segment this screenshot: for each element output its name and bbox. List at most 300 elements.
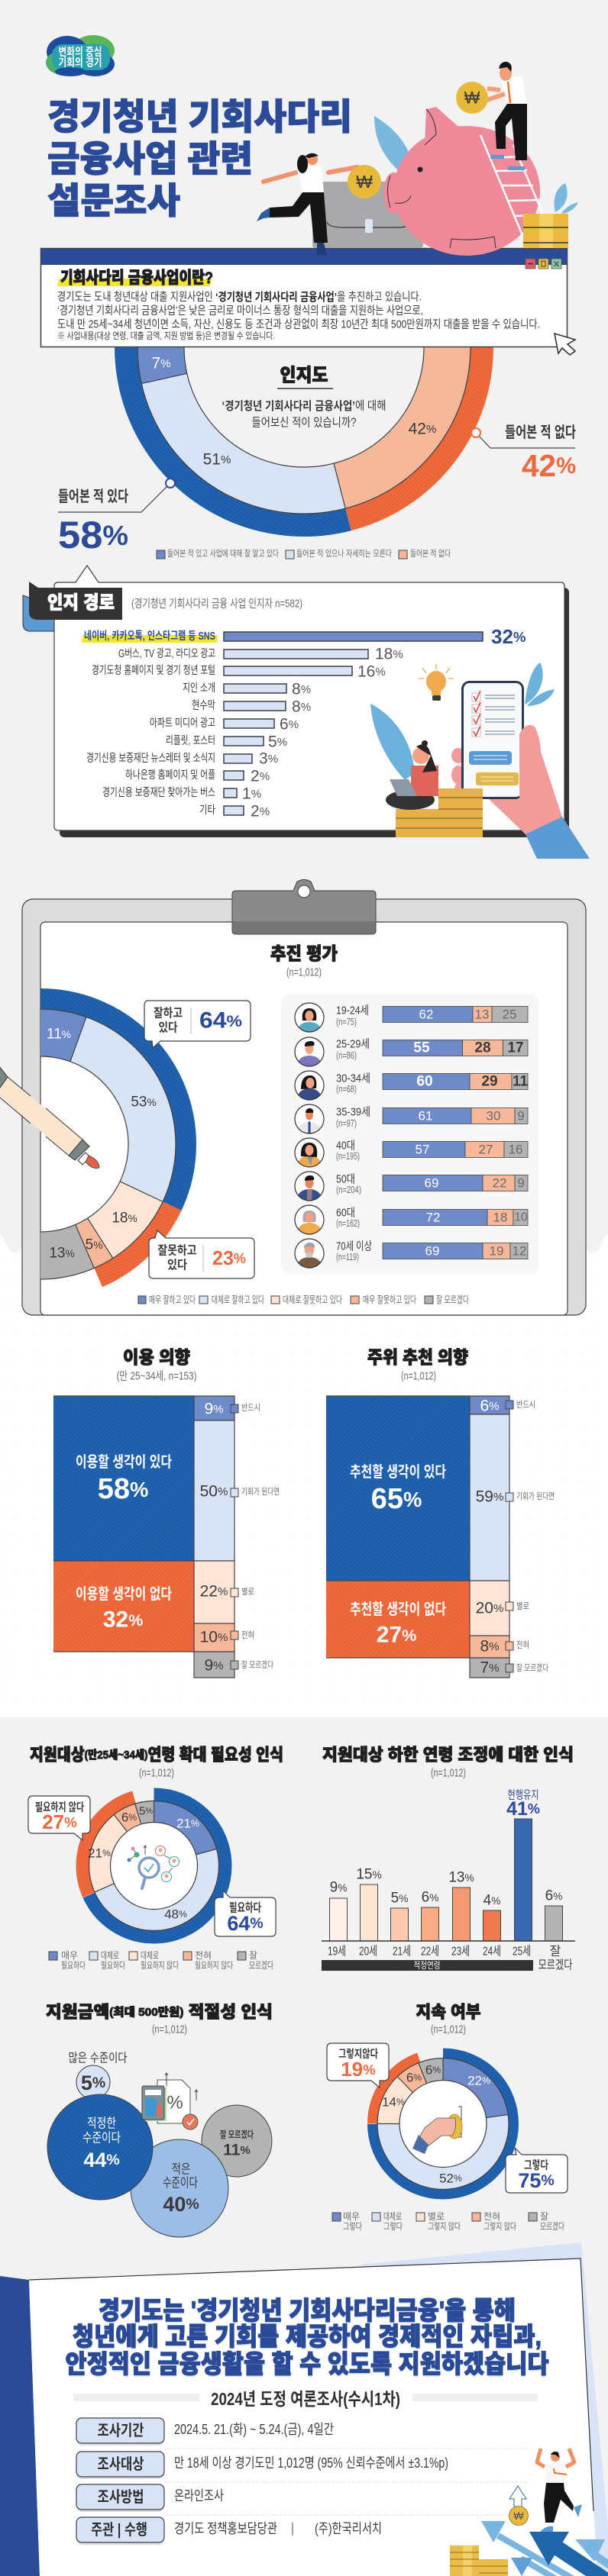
illustration: phone and hand	[370, 663, 590, 859]
paper back	[361, 2242, 608, 2576]
coin upper	[456, 82, 488, 114]
bar chart: channels: 18%	[375, 646, 403, 663]
closing headline: 청년에게 고른 기회를 제공하여 경제적인 자립과,	[73, 2322, 542, 2351]
x axis labels: 24세	[483, 1945, 501, 1959]
heading: (n=1,012)	[431, 1766, 466, 1780]
bubble: 40%	[131, 2139, 228, 2237]
row: 40s: (n=195)	[336, 1151, 360, 1162]
bubble: 5%: 5%	[81, 2071, 105, 2094]
ladder	[480, 135, 558, 248]
x axis labels: 25세	[513, 1945, 531, 1959]
row: 35-39: 35-39세	[336, 1105, 370, 1119]
donut percent labels: 42%	[409, 420, 436, 438]
window body text	[57, 290, 540, 341]
segment keys: 전혀	[241, 1630, 254, 1640]
row: 50s: 9	[517, 1175, 525, 1191]
callout: not heard 42%: 42%	[522, 448, 576, 483]
donut labels: 53%	[131, 1095, 157, 1110]
window body text: ‘경기청년 기회사다리 금융사업’은 낮은 금리로 마이너스 통장 형식의 대출을 지원하는 사업으로,	[57, 304, 423, 318]
title: 경기청년 기회사다리	[47, 96, 352, 137]
donut labels: 6%	[406, 2070, 422, 2085]
window body text: ※ 사업내용(대상 연령, 대출 금액, 지원 방법 등)은 변경될 수 있습니다.	[57, 330, 275, 341]
legend	[49, 1950, 273, 1971]
x axis labels: 23세	[451, 1945, 470, 1959]
bubble: 44%	[47, 2094, 153, 2200]
row: method: 조사방법	[98, 2488, 144, 2506]
bar chart: channels: G버스, TV 광고, 라디오 광고	[118, 647, 215, 660]
x axis labels: 모르겠다	[538, 1959, 573, 1972]
legend: awareness: 들어본 적 있고 사업에 대해 잘 알고 있다	[167, 548, 279, 559]
legend: awareness: 들어본 적 없다	[410, 549, 451, 559]
donut percent labels: 7%	[151, 354, 171, 372]
inner ring peach	[160, 205, 448, 490]
row: period: 조사기간	[98, 2422, 144, 2439]
clipboard board	[22, 899, 586, 1315]
panel body with tail	[54, 566, 564, 830]
column: detail segments	[53, 1396, 234, 1678]
row: 30-34	[295, 1071, 528, 1100]
panel: intent to recommend	[326, 1347, 555, 1678]
bar chart: channels: 32%	[491, 625, 526, 648]
bar values: 4%	[483, 1893, 500, 1908]
callout: yes 75%	[506, 2148, 568, 2193]
callout: yes 75%: 그렇다	[524, 2158, 548, 2172]
bar chart: channels: 기타	[199, 804, 215, 817]
row: 70+: 70세 이상	[336, 1240, 372, 1253]
outer ring orange: not heard 42	[126, 169, 482, 525]
clip	[232, 879, 376, 934]
callout: yes 75%: 75%	[518, 2169, 555, 2192]
heading	[416, 2003, 481, 2036]
bubble: 11%	[202, 2105, 272, 2177]
bubble: 11%: 잘 모르겠다	[220, 2129, 254, 2140]
callout: not needed 27%: 27%	[42, 1810, 77, 1833]
block: yes 65	[326, 1396, 470, 1581]
callout: doing well 64%: 있다	[159, 1021, 178, 1035]
donut labels: 21%	[88, 1846, 111, 1861]
heading: 지원대상 하한 연령 조정에 대한 인식	[322, 1745, 574, 1765]
phone	[463, 682, 522, 798]
closing headline: 경기도는 '경기청년 기회사다리금융'을 통해	[99, 2296, 516, 2325]
block: yes 65: 65%	[371, 1483, 422, 1515]
donut centre heading: 들어보신 적이 있습니까?	[252, 415, 357, 429]
segment keys: 반드시	[241, 1403, 260, 1413]
segment values: 8%	[480, 1638, 500, 1655]
logo badge	[46, 35, 115, 76]
bar chart: channels: 8%	[292, 681, 311, 698]
panel: age breakdown	[294, 1002, 529, 1269]
panel: awareness channel	[23, 566, 590, 859]
callout: doing poorly 23%: 23%	[212, 1246, 246, 1269]
bar values: 41%	[506, 1798, 540, 1820]
segment keys: 기회가 된다면	[241, 1487, 280, 1497]
legend: 필요하다	[61, 1960, 86, 1971]
icon: pen	[0, 1062, 99, 1169]
segment keys: 별로	[241, 1587, 254, 1597]
bulb	[419, 664, 454, 701]
window heading: 기회사다리 금융사업이란?	[60, 269, 213, 287]
row: period: 2024.5. 21.(화) ~ 5.24.(금), 4일간	[174, 2422, 334, 2437]
row: target: 만 18세 이상 경기도민 1,012명 (95% 신뢰수준에서 ±3.1%p)	[174, 2455, 448, 2471]
segment keys: 별로	[516, 1601, 529, 1611]
row: 40s	[295, 1138, 528, 1167]
legend: 매우	[61, 1950, 78, 1961]
row: 60s	[295, 1205, 528, 1234]
row: method: 온라인조사	[174, 2488, 224, 2503]
closing headline: 청년에게 고른 기회를 제공하여 경제적인 자립과,	[73, 2323, 542, 2352]
donut: evaluation	[0, 951, 234, 1337]
bar chart: channels: 8%	[292, 698, 311, 716]
callout: doing poorly 23%	[149, 1230, 254, 1278]
heading	[46, 2003, 273, 2036]
row: 40s: 40대	[336, 1139, 355, 1153]
x axis labels: 22세	[421, 1945, 439, 1959]
bubble: 40%: 적은	[171, 2162, 191, 2177]
icon: magnifier and people	[127, 1846, 179, 1888]
legend: evaluation: 대체로 잘못하고 있다	[283, 1294, 342, 1305]
background: white dotted middle section	[0, 1235, 608, 1717]
legend: 모르겠다	[540, 2221, 564, 2232]
segment keys: 전혀	[516, 1640, 529, 1650]
segment keys: 잘 모르겠다	[516, 1662, 548, 1673]
bar chart: channels: 네이버, 카카오톡, 인스타그램 등 SNS	[84, 630, 215, 643]
callout: doing poorly 23%: 잘못하고	[157, 1244, 197, 1258]
bar values: 현행유지	[507, 1789, 539, 1801]
coins	[396, 788, 483, 837]
legend: evaluation	[138, 1294, 469, 1305]
row: 60s: 60대	[336, 1206, 355, 1220]
row: 30-34: 29	[481, 1073, 498, 1090]
callout: not heard 42%	[471, 424, 576, 483]
tag fold	[23, 595, 54, 631]
donut percent labels: 51%	[203, 450, 231, 469]
block: yes 58	[53, 1396, 194, 1561]
bar chart: channels: 아파트 미디어 광고	[150, 717, 215, 730]
heading	[270, 943, 338, 978]
segment values: 10%	[200, 1629, 228, 1646]
logo badge: 기회의 경기	[58, 56, 102, 69]
illustration: arrows	[481, 2521, 608, 2576]
coin upper: ₩	[464, 89, 480, 107]
bubble: 44%: 적정한	[87, 2116, 116, 2131]
segment values: 50%	[200, 1482, 228, 1501]
row: 40s: 16	[509, 1142, 522, 1157]
donut: awareness half ring	[87, 131, 521, 564]
segment values: 22%	[200, 1583, 228, 1600]
bar chart: channels: 리플릿, 포스터	[166, 734, 215, 747]
bar values: 6%	[422, 1890, 438, 1905]
callout: heard 58%: 들어본 적 있다	[58, 488, 128, 505]
donut labels	[47, 1026, 157, 1261]
legend	[332, 2211, 564, 2232]
row: 30-34: (n=68)	[336, 1084, 357, 1095]
legend: evaluation: 매우 잘못하고 있다	[363, 1294, 416, 1305]
illustration: coins	[450, 2545, 508, 2576]
donut labels: 22%	[467, 2073, 490, 2088]
donut centre heading	[222, 365, 386, 429]
row: 19-24: 13	[475, 1008, 489, 1021]
briefcase	[312, 182, 423, 248]
bar chart: channels: 경기신용 보증재단 뉴스레터 및 소식지	[86, 752, 215, 765]
bubble: 5%	[76, 2065, 110, 2099]
title	[47, 96, 352, 221]
callout: doing well 64%: 64%	[199, 1008, 242, 1033]
leaves	[370, 704, 415, 780]
callout: doing well 64%	[144, 1001, 251, 1048]
block: no 27	[326, 1581, 470, 1658]
donut labels: 5%	[86, 1236, 102, 1253]
row: 35-39: (n=97)	[336, 1118, 357, 1129]
bar values: 6%	[545, 1888, 562, 1904]
row: 19-24: 62	[419, 1008, 433, 1021]
callout: doing well 64%: 잘하고	[154, 1006, 183, 1020]
row: target: 조사대상	[98, 2455, 144, 2473]
segment keys: 잘 모르겠다	[241, 1659, 273, 1670]
panel: intent to use	[53, 1347, 280, 1678]
callout: no 19%: 19%	[341, 2058, 376, 2081]
survey heading	[73, 2389, 538, 2409]
heading: (n=1,012)	[152, 2023, 187, 2036]
legend: 별로	[428, 2211, 445, 2222]
legend: awareness	[157, 548, 451, 559]
closing headline: 안정적인 금융생활을 할 수 있도록 지원하겠습니다	[66, 2351, 548, 2380]
legend: 잘	[540, 2211, 548, 2222]
illustration: coin with up arrow: ₩	[513, 2510, 524, 2522]
heading: 추진 평가	[270, 943, 338, 963]
legend: 필요하다	[101, 1960, 125, 1971]
range bar	[322, 1960, 533, 1971]
row: 50s: 69	[425, 1175, 438, 1191]
bubble: 40%: 수준이다	[163, 2175, 198, 2191]
row: period	[76, 2418, 334, 2445]
tag: 인지 경로	[47, 592, 115, 614]
donut labels: 14%	[382, 2094, 405, 2110]
row: 30-34: 60	[416, 1073, 433, 1090]
segment values	[200, 1400, 228, 1675]
callout: heard 58%	[58, 479, 175, 556]
row: target	[76, 2452, 448, 2479]
bar values: 15%	[356, 1867, 382, 1882]
callout: not heard 42%: 들어본 적 없다	[505, 424, 576, 441]
row: organiser: 경기도 정책홍보담당관	[174, 2521, 277, 2536]
row: 19-24: 19-24세	[336, 1004, 369, 1017]
donut centre heading: 인지도	[280, 365, 328, 386]
pig	[383, 107, 540, 256]
bar values: 9%	[330, 1879, 347, 1896]
row: 70+	[295, 1239, 528, 1268]
hand	[489, 725, 562, 836]
bar chart: channels: 현수막	[192, 699, 215, 712]
donut labels: 52%	[439, 2171, 462, 2186]
block: no 32	[53, 1561, 194, 1652]
donut labels	[88, 1804, 199, 1922]
legend: 전혀	[195, 1950, 212, 1961]
row: 35-39: 9	[517, 1108, 525, 1124]
heading	[116, 1347, 197, 1383]
survey heading: 2024년 도정 여론조사(수시1차)	[211, 2389, 400, 2409]
legend: 전혀	[483, 2211, 500, 2222]
row: 19-24	[295, 1003, 528, 1032]
phone fingers	[451, 748, 467, 795]
row: 25-29: 55	[413, 1040, 430, 1056]
legend: evaluation: 매우 잘하고 있다	[149, 1294, 196, 1305]
heading: (만 25~34세, n=153)	[116, 1369, 197, 1383]
row: 70+: 12	[513, 1244, 526, 1258]
legend: 그렇다	[343, 2220, 362, 2232]
legend: 필요하지 않다	[195, 1960, 233, 1971]
icon: hand inserting coin	[412, 2107, 462, 2154]
block: no 32: 32%	[103, 1607, 143, 1632]
bar values: 13%	[448, 1870, 474, 1885]
donut labels: 5%	[139, 1804, 153, 1818]
background: grey lower section	[0, 1717, 608, 2576]
bar chart: channels: 2%	[251, 768, 270, 785]
callout: no 19%: 그렇지않다	[338, 2048, 379, 2061]
closing headline: 안정적인 금융생활을 할 수 있도록 지원하겠습니다	[66, 2349, 548, 2378]
woman with laptop	[386, 740, 438, 810]
heading	[367, 1347, 468, 1383]
legend: 잘	[249, 1950, 257, 1961]
bubble: 44%: 44%	[83, 2149, 120, 2171]
bar values: 5%	[391, 1890, 408, 1907]
callout: not needed 27%: 필요하지 않다	[35, 1801, 84, 1814]
illustration: piggy bank hero	[257, 62, 578, 256]
segment values	[476, 1397, 503, 1676]
block: yes 58: 58%	[98, 1473, 148, 1505]
donut	[60, 1772, 248, 1960]
heading	[322, 1745, 574, 1780]
bar chart	[322, 1789, 575, 1972]
bubble: 40%: 40%	[163, 2193, 199, 2216]
white paper	[29, 2258, 597, 2576]
legend: 대체로	[383, 2211, 402, 2222]
dotted row dividers	[165, 2449, 527, 2515]
row: 30-34: 11	[513, 1073, 528, 1090]
panel: lower age limit	[322, 1745, 575, 1972]
segment values: 9%	[204, 1400, 224, 1418]
row: 50s	[295, 1172, 528, 1201]
callout: needed 64%	[215, 1891, 276, 1936]
x axis labels: 20세	[359, 1945, 377, 1959]
row: 35-39	[295, 1104, 528, 1133]
row: 60s: 72	[426, 1211, 440, 1224]
sleeve	[526, 817, 590, 859]
segment values: 59%	[476, 1488, 503, 1505]
bar chart: channels: 3%	[259, 750, 278, 768]
icon: cursor	[555, 334, 575, 355]
block: yes 58: 이용할 생각이 있다	[76, 1453, 172, 1471]
heading: 지속 여부	[416, 2003, 481, 2021]
segment keys: 기회가 된다면	[516, 1491, 555, 1501]
closing headline: 경기도는 '경기청년 기회사다리금융'을 통해	[99, 2297, 516, 2326]
ring outlines	[137, 181, 471, 514]
donut	[366, 2046, 520, 2201]
donut labels	[382, 2062, 490, 2186]
legend: 매우	[343, 2211, 360, 2222]
bar chart: channels	[82, 625, 526, 820]
callout: needed 64%: 필요하다	[229, 1901, 261, 1914]
heading: (n=1,012)	[401, 1369, 436, 1383]
panel: closing note paper	[0, 2242, 608, 2576]
row: method	[76, 2484, 224, 2512]
coin lower: ₩	[356, 172, 373, 192]
heading: 이용 의향	[123, 1347, 190, 1367]
row: 35-39: 30	[487, 1108, 500, 1124]
column: detail segments	[326, 1396, 509, 1678]
row: 50s: 22	[493, 1175, 506, 1191]
x axis labels: 잘	[550, 1945, 561, 1959]
block: no 27: 27%	[377, 1623, 416, 1647]
donut labels: 48%	[164, 1907, 187, 1922]
blue band left	[0, 2276, 40, 2576]
block: yes 65: 추천할 생각이 있다	[350, 1463, 446, 1481]
window panel: what is the program	[41, 249, 567, 347]
row: 30-34: 30-34세	[336, 1072, 370, 1085]
row: 25-29	[295, 1037, 528, 1066]
legend: 그렇지 않다	[428, 2220, 461, 2232]
segment keys: 반드시	[516, 1400, 535, 1410]
heading: 지원대상(만25세~34세)연령 확대 필요성 인식	[30, 1745, 283, 1765]
block: no 27: 추천할 생각이 없다	[350, 1601, 446, 1618]
segment values: 20%	[476, 1600, 503, 1617]
row: 40s: 57	[416, 1142, 429, 1157]
closing headline	[66, 2296, 548, 2380]
row: 35-39: 61	[419, 1108, 432, 1124]
heading: 주위 추천 의향	[367, 1347, 468, 1367]
tag	[29, 582, 122, 620]
woman running	[257, 153, 357, 255]
legend: awareness: 들어본 적 있으나 자세히는 모른다	[296, 548, 392, 559]
heading: (n=1,012)	[286, 966, 322, 978]
x axis labels: 19세	[328, 1945, 346, 1959]
row: 70+: 69	[425, 1244, 439, 1258]
bar chart: channels: 하나은행 홈페이지 및 어플	[125, 769, 215, 782]
window buttons	[526, 259, 561, 269]
logo badge: 변화의 중심	[58, 46, 102, 59]
bar chart: channels: 1%	[242, 785, 261, 803]
x axis labels	[328, 1945, 573, 1972]
heading: (n=1,012)	[431, 2023, 466, 2036]
illustration: coin with up arrow	[509, 2486, 529, 2525]
bar chart: channels: 2%	[251, 803, 270, 820]
subtitle: (경기청년 기회사다리 금융 사업 인지자 n=582)	[131, 597, 302, 611]
label: too much: 많은 수준이다	[69, 2052, 128, 2065]
row: organiser: 주관 | 수행	[91, 2521, 147, 2539]
callout: heard 58%: 58%	[58, 514, 128, 556]
callout: needed 64%: 64%	[227, 1912, 264, 1935]
donut percent labels	[151, 354, 436, 469]
illustration: cheering man	[537, 2449, 582, 2532]
row: 19-24: (n=75)	[336, 1017, 357, 1027]
legend: 필요하지 않다	[141, 1960, 179, 1971]
inner ring light blue	[130, 173, 478, 521]
man on ladder	[485, 62, 527, 170]
legend: 대체로	[101, 1950, 119, 1961]
row: 60s: 18	[493, 1211, 507, 1224]
row: 25-29: 17	[507, 1040, 524, 1056]
row: 40s: 27	[479, 1142, 493, 1157]
coin stack right	[523, 214, 568, 248]
legend: evaluation: 잘 모르겠다	[436, 1294, 469, 1305]
bar chart: channels: 지인 소개	[183, 682, 215, 695]
row: 19-24: 25	[503, 1008, 516, 1021]
panel: clipboard evaluation	[0, 879, 586, 1337]
background: clipboard wave edges	[0, 1235, 608, 1253]
legend: 그렇다	[383, 2220, 403, 2232]
row: 25-29: 28	[474, 1040, 491, 1056]
bar chart: channels: 경기도청 홈페이지 및 경기 청년 포털	[92, 664, 215, 677]
heading	[30, 1745, 283, 1780]
